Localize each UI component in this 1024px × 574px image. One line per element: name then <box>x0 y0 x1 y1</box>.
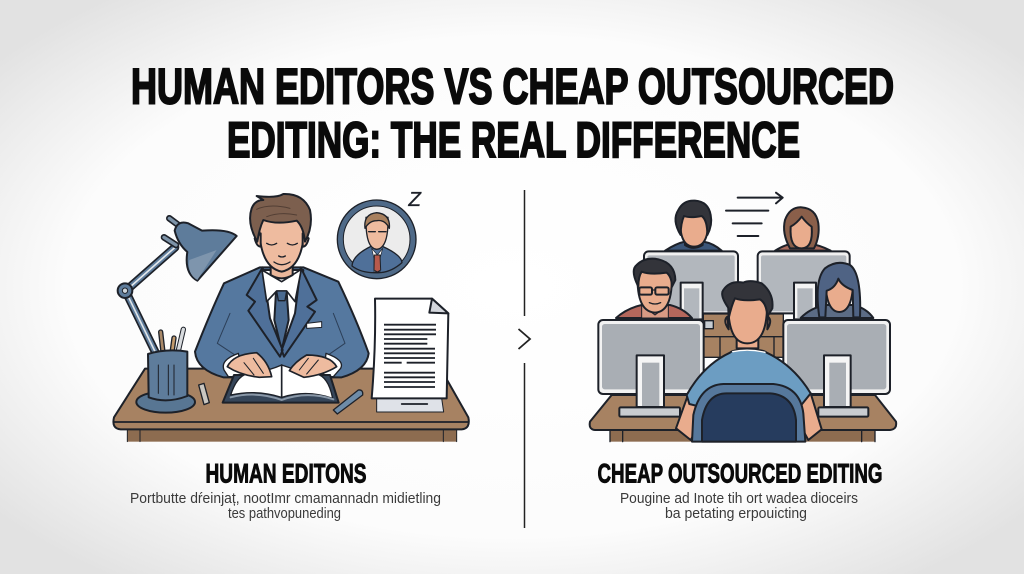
middle right worker <box>801 263 873 318</box>
right caption: cheap outsourced editing: ba petating erpouicting <box>665 506 807 522</box>
pencil cup <box>136 329 195 413</box>
back left worker <box>665 201 722 251</box>
right caption: cheap outsourced editing: Pougine ad Inote tih ort wadea dioceirs <box>620 491 858 507</box>
front worker from behind <box>676 281 822 442</box>
front monitor stands <box>619 355 868 417</box>
divider with chevron <box>518 190 530 528</box>
open book with hands <box>223 353 339 403</box>
front monitors <box>598 320 890 394</box>
rear monitors <box>644 251 850 313</box>
lamp <box>118 218 237 355</box>
title <box>131 58 894 168</box>
rear desk <box>703 314 783 357</box>
sleep mark: Z <box>407 188 422 211</box>
left caption: human editors: Portbutte dŕeinjaț, nootImr cmamannadn midietling <box>130 491 441 507</box>
left caption: human editors: tes pathvopuneding <box>228 506 341 522</box>
portrait circle <box>337 200 416 279</box>
speed lines and arrow <box>726 193 783 236</box>
back right worker <box>775 207 831 251</box>
illustration: human editor at desk <box>113 188 469 442</box>
eraser <box>199 383 209 405</box>
title: EDITING: THE REAL DIFFERENCE <box>227 112 800 168</box>
pen <box>333 390 363 414</box>
illustration: outsourced team at computers <box>590 193 896 442</box>
right caption: cheap outsourced editing: CHEAP OUTSOURCED EDITING <box>598 458 882 488</box>
right caption: cheap outsourced editing <box>598 458 882 522</box>
middle left worker with glasses <box>616 259 692 318</box>
rear monitor stands <box>681 283 816 319</box>
left caption: human editors <box>130 458 441 522</box>
man in suit <box>195 194 369 377</box>
desk <box>113 369 469 442</box>
document <box>372 299 448 412</box>
left caption: human editors: HUMAN EDITONS <box>206 458 366 488</box>
front desk <box>590 395 896 442</box>
